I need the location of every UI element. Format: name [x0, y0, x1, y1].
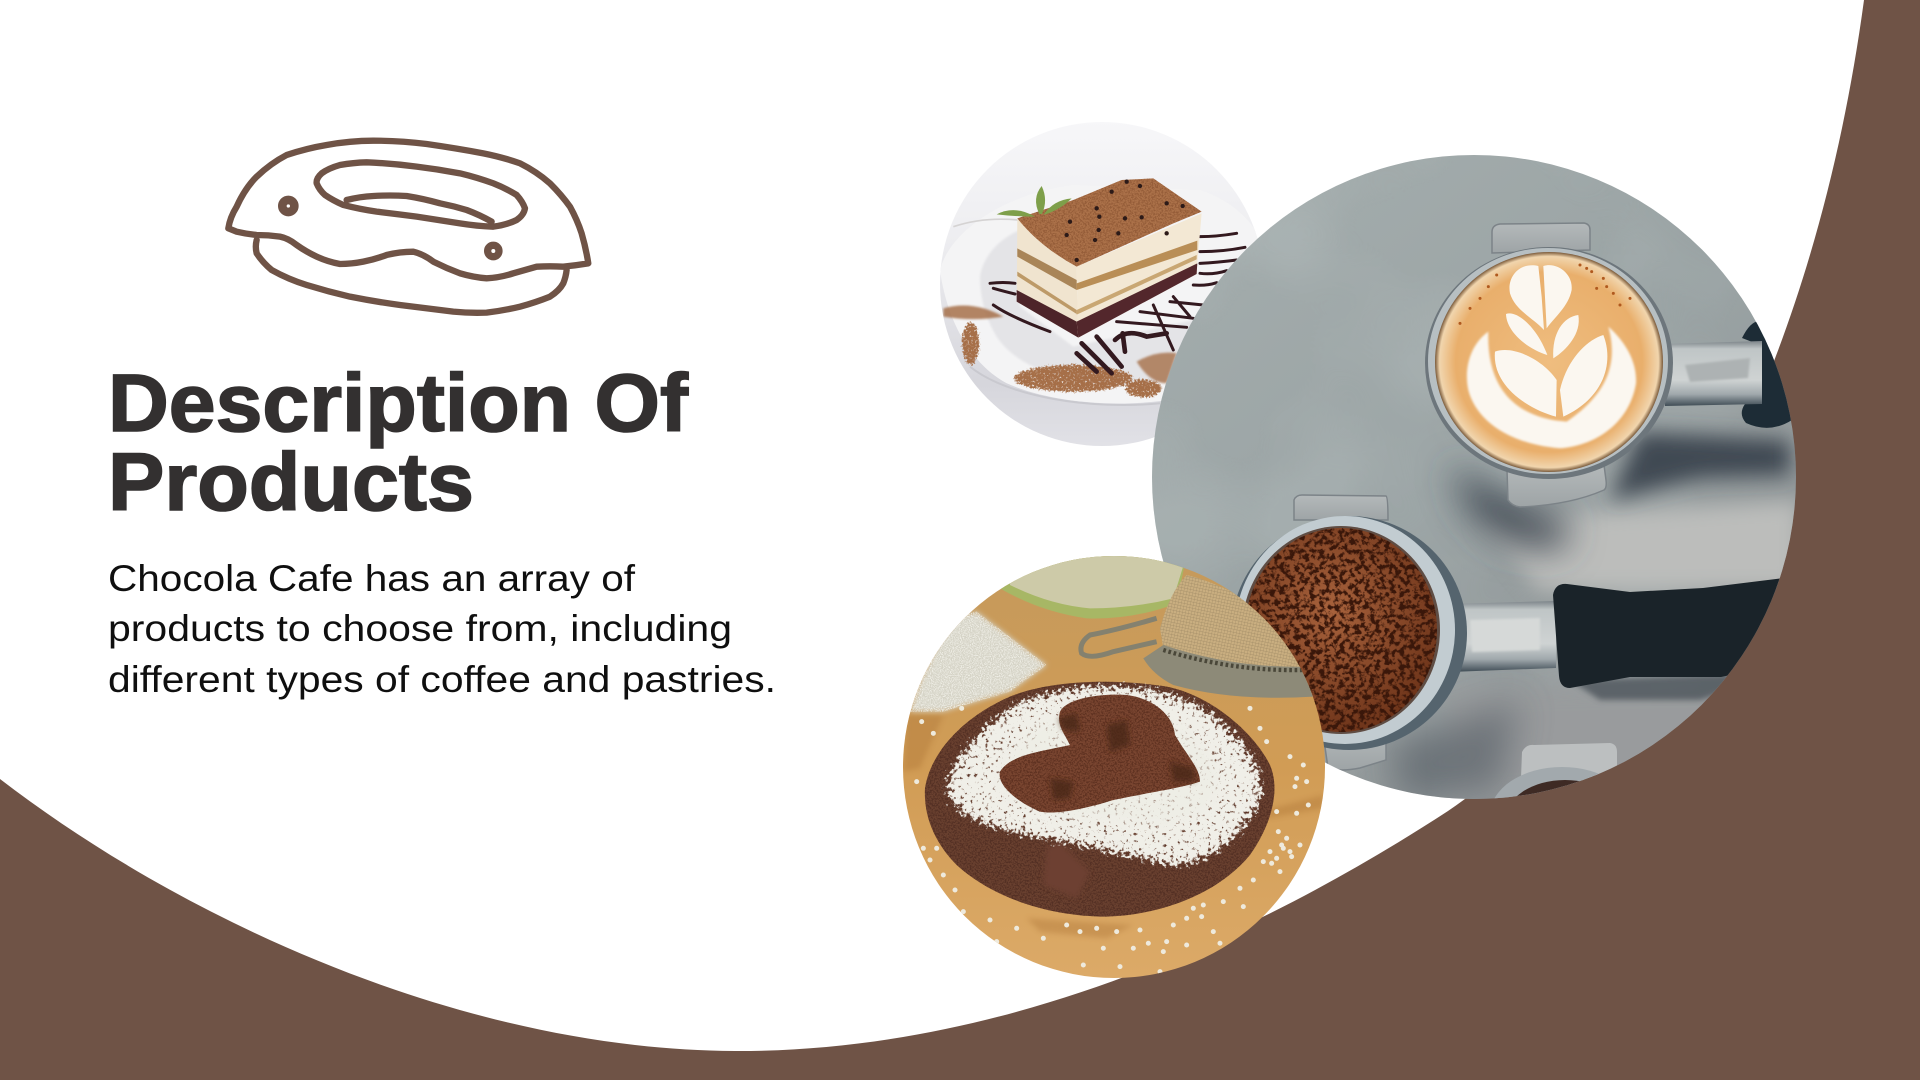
sieve handle loop	[1081, 618, 1157, 656]
upper cup rim	[1425, 247, 1673, 479]
wooden board backdrop	[900, 555, 1333, 980]
photo circle: espresso portafilters	[1152, 155, 1800, 863]
upper cup handle end	[1742, 321, 1792, 428]
latte milk art	[1460, 265, 1636, 448]
green glass bowl	[1000, 555, 1187, 618]
body text	[108, 558, 776, 700]
cookie chunk	[1043, 842, 1090, 898]
lower cup rim	[1231, 516, 1467, 750]
scattered sugar on board	[917, 708, 1308, 972]
photo circle: chocolate cookie with powdered sugar	[900, 555, 1333, 980]
title line 1: Description Of	[108, 358, 689, 449]
cake photo backdrop	[940, 120, 1270, 450]
sprinkle left	[282, 200, 294, 212]
plate	[940, 218, 1246, 406]
mottled surface texture	[1154, 362, 1558, 674]
latte middle leaves	[1506, 313, 1579, 358]
cookie body	[925, 682, 1274, 917]
latte large leaves	[1495, 335, 1607, 417]
lower portafilter with ground coffee	[1231, 495, 1800, 770]
doughnut hole outline	[317, 162, 525, 227]
powdered sugar	[940, 681, 1267, 870]
sprinkle right	[488, 245, 499, 257]
cookie crumb texture	[925, 682, 1274, 917]
cake long side layers	[1077, 213, 1202, 338]
doughnut icing outline	[228, 141, 588, 278]
photo circle: tiramisu cake	[940, 120, 1270, 450]
mint leaf	[997, 186, 1072, 217]
cake short side layers	[1017, 218, 1078, 338]
sieve mesh	[1160, 575, 1303, 668]
flour pile	[910, 612, 1047, 712]
lower cup black handle	[1553, 578, 1780, 688]
cocoa dust on plate	[943, 306, 1177, 399]
upper cup tabs	[1492, 223, 1606, 507]
ground coffee dark grain	[1245, 528, 1437, 732]
heart of bare cocoa	[1000, 695, 1200, 813]
body line 1: Chocola Cafe has an array of	[108, 558, 636, 599]
cocoa cake top	[1017, 178, 1202, 267]
doughnut lower edge	[256, 240, 567, 313]
lower cup metal handle	[1450, 601, 1556, 672]
soft shadows and steel highlights	[1390, 432, 1800, 800]
sieve band	[1143, 645, 1313, 698]
chocolate drizzle	[990, 233, 1245, 373]
body line 3: different types of coffee and pastries.	[108, 659, 776, 700]
latte crema	[1435, 252, 1663, 472]
third portafilter at bottom edge	[1494, 743, 1617, 798]
chocolate chips	[1050, 713, 1195, 800]
doughnut hole inner line	[347, 195, 492, 222]
lower cup tabs	[1294, 495, 1388, 770]
title	[108, 358, 689, 528]
latte top heart	[1509, 265, 1572, 330]
icon: hand drawn doughnut	[228, 141, 588, 313]
concrete and steel backdrop	[1152, 155, 1796, 799]
wood grain streaks	[903, 715, 1323, 938]
body line 2: products to choose from, including	[108, 608, 732, 649]
sieve	[1081, 575, 1313, 698]
ground coffee	[1245, 528, 1437, 732]
crema speckles	[1460, 265, 1630, 323]
upper cup handle	[1665, 341, 1762, 406]
title line 2: Products	[108, 437, 474, 528]
upper portafilter with latte	[1425, 223, 1792, 507]
latte milk ring	[1467, 327, 1636, 448]
